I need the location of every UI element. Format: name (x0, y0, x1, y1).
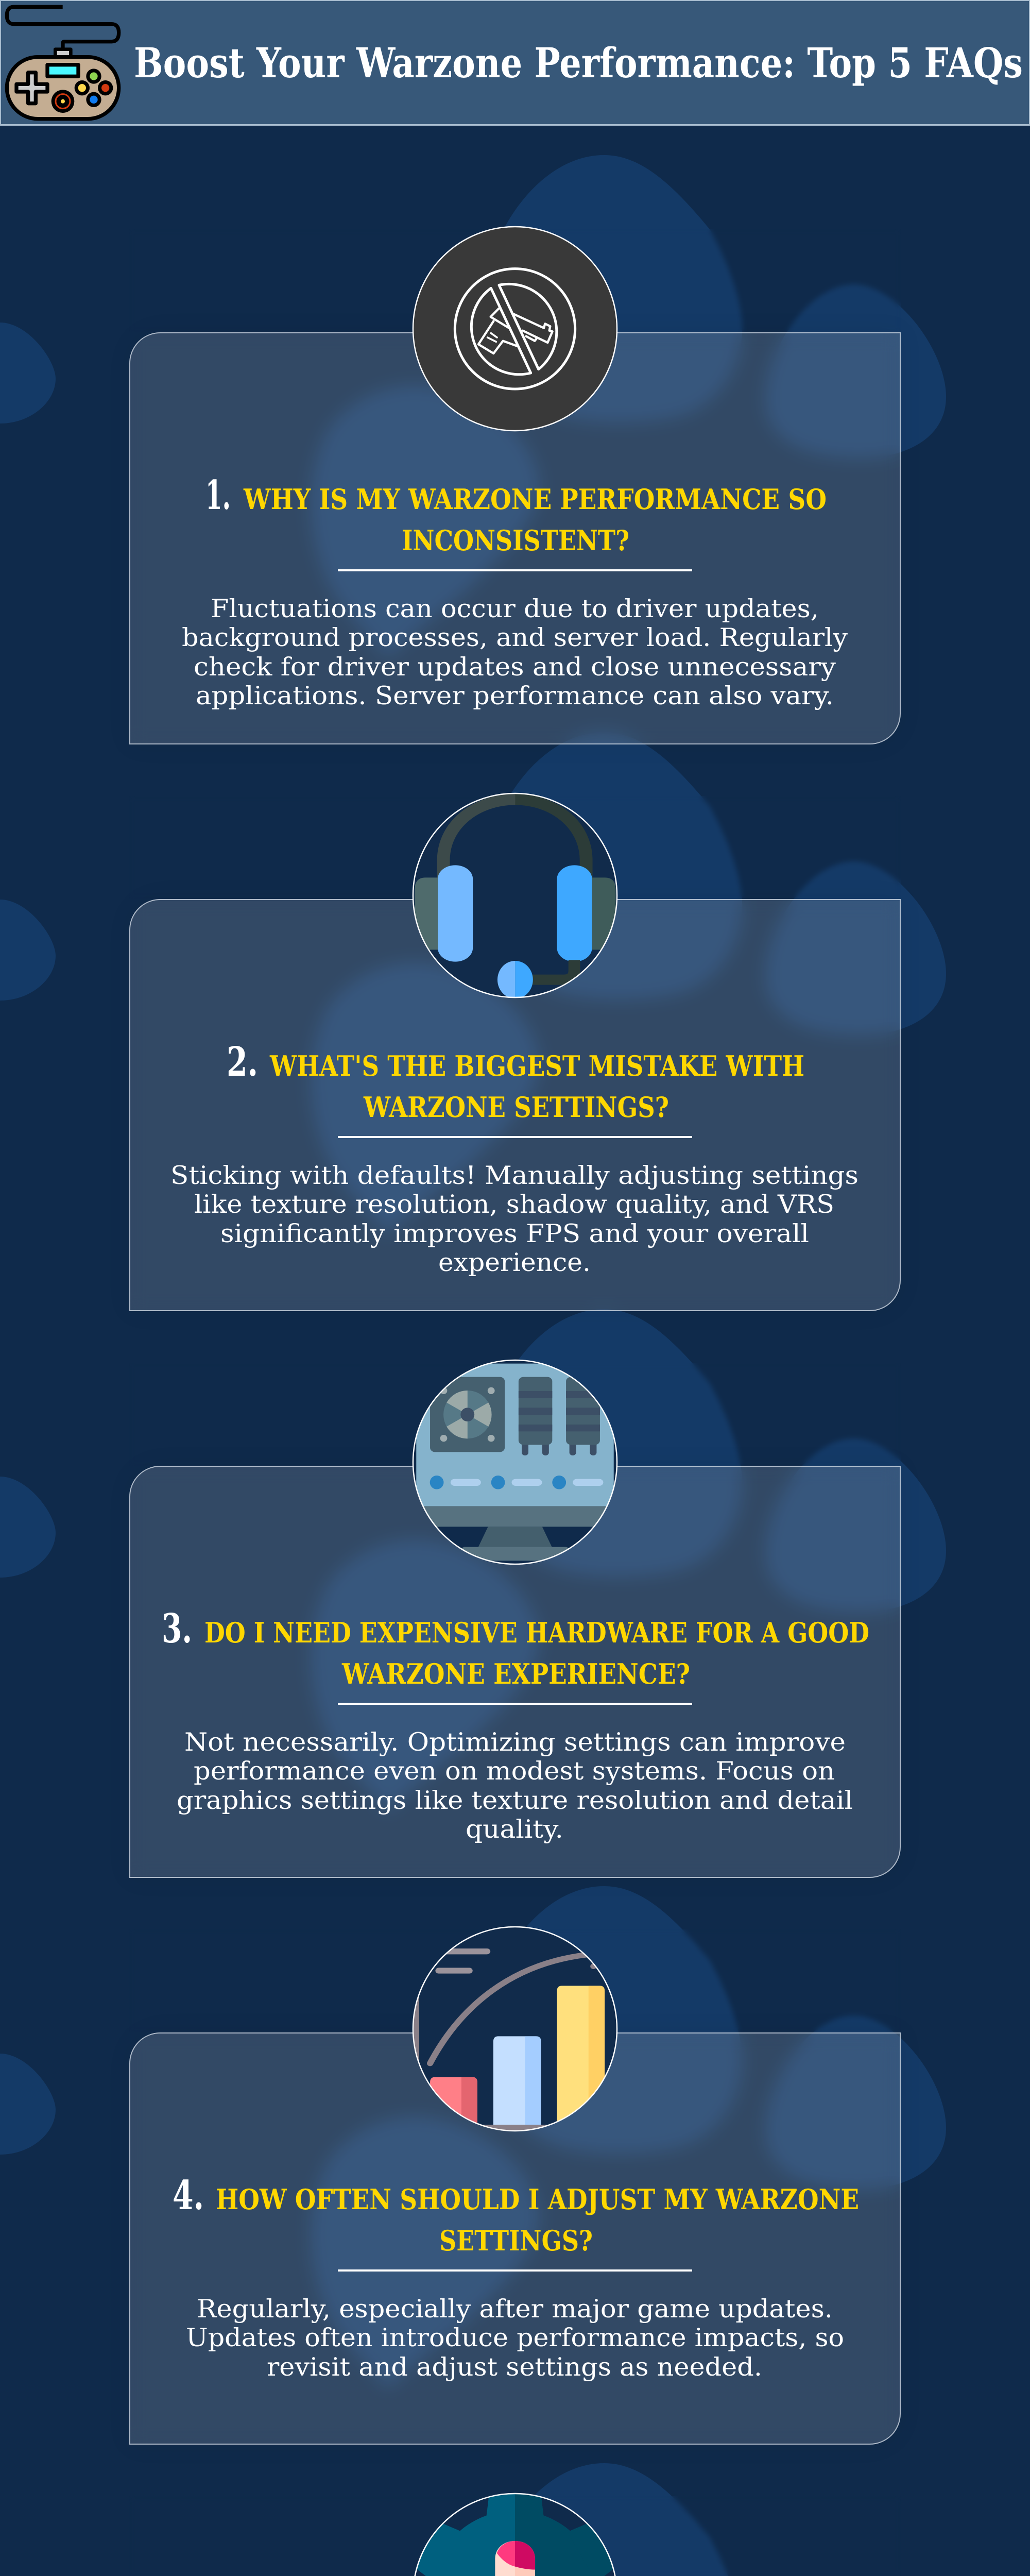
answer 3: performance even on modest systems. Focus on (194, 1756, 835, 1786)
heading 2 (227, 1039, 804, 1124)
panel: FAQ 1 (129, 226, 901, 744)
answer 1: Fluctuations can occur due to driver updates, (211, 594, 819, 623)
card background 3 (129, 1466, 901, 1878)
heading 4 (173, 2172, 859, 2257)
heading 3 (162, 1605, 869, 1690)
answer 4: Regularly, especially after major game updates. (197, 2294, 833, 2324)
icon: rising bar chart (412, 1926, 618, 2132)
answer 2: Sticking with defaults! Manually adjusting settings (170, 1161, 859, 1190)
answer 2: significantly improves FPS and your overall (220, 1219, 809, 1248)
answer 4: Updates often introduce performance impacts, so (186, 2323, 844, 2352)
panel: FAQ 5 (414, 2493, 728, 2576)
FAQ 3 content (162, 1359, 869, 1844)
icon: crossed-out pistol (413, 227, 617, 431)
FAQ 2 content (170, 792, 859, 1277)
answer 1: applications. Server performance can also vary. (196, 681, 834, 710)
heading 2: WHAT'S THE BIGGEST MISTAKE WITH (269, 1049, 804, 1082)
heading 1 (205, 472, 827, 557)
icon: headset (413, 793, 617, 998)
answer 4 (186, 2294, 844, 2382)
header banner (0, 0, 1030, 126)
card background 2 (129, 899, 901, 1311)
answer 1 (182, 594, 848, 710)
answer 3: quality. (466, 1815, 563, 1844)
answer 4: revisit and adjust settings as needed. (267, 2352, 762, 2382)
answer 1: background processes, and server load. Regularly (182, 623, 848, 652)
panel: FAQ 2 (129, 792, 901, 1311)
heading 4: 4. (173, 2172, 204, 2219)
FAQ 5 content (414, 2493, 616, 2576)
heading 3: WARZONE EXPERIENCE? (341, 1657, 690, 1690)
panel: FAQ 3 (129, 1359, 901, 1878)
answer 3: graphics settings like texture resolution and detail (177, 1786, 853, 1815)
icon: computer hardware monitor (412, 1359, 618, 1565)
icon: person in gear (412, 2493, 618, 2576)
heading 2: WARZONE SETTINGS? (363, 1091, 669, 1124)
heading 1: INCONSISTENT? (402, 524, 629, 557)
FAQ 1 content (182, 226, 848, 710)
FAQ 4 content (173, 1926, 859, 2382)
heading 1: WHY IS MY WARZONE PERFORMANCE SO (243, 483, 827, 516)
heading 3: 3. (162, 1605, 192, 1652)
answer 3 (177, 1727, 853, 1844)
answer 1: check for driver updates and close unnecessary (194, 652, 836, 682)
icon: game controller (7, 7, 119, 119)
answer 3: Not necessarily. Optimizing settings can improve (184, 1727, 846, 1757)
answer 2: experience. (438, 1248, 591, 1277)
panel: FAQ 4 (129, 1926, 901, 2445)
card background 1 (129, 332, 901, 744)
heading 1: 1. (205, 472, 231, 519)
heading 4: SETTINGS? (439, 2224, 593, 2257)
answer 2: like texture resolution, shadow quality, and VRS (194, 1190, 834, 1219)
answer 2 (170, 1161, 859, 1277)
card background 4 (129, 2032, 901, 2445)
heading 2: 2. (227, 1039, 258, 1086)
